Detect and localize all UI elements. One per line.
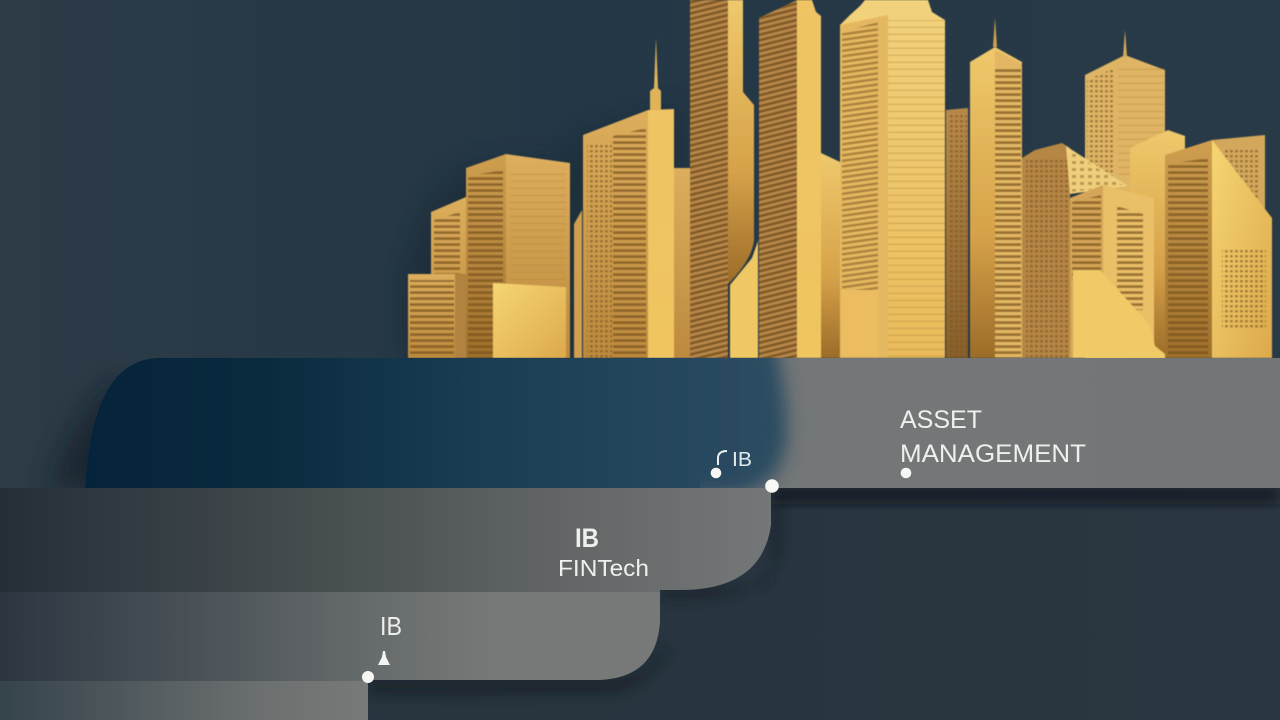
marker: asset management dot [901, 468, 911, 478]
tier 2 band [0, 488, 771, 592]
shadow under third band [368, 640, 666, 694]
label: top IB with hook icon [718, 449, 752, 471]
label: top IB with hook icon: IB [732, 449, 752, 471]
building: front yellow block [493, 283, 566, 358]
city skyline [408, 0, 1272, 360]
building: back left tower [431, 197, 466, 358]
label: IB FINTech: FINTech [558, 555, 649, 581]
building: far right block [1165, 135, 1272, 358]
building: mid block [821, 153, 857, 358]
shadow under second band [660, 500, 782, 600]
building: tan back block [1130, 130, 1185, 358]
shadow under top band [772, 486, 1280, 504]
building: tall tower [690, 0, 754, 358]
icon: small pin [378, 651, 390, 665]
label: asset management [900, 406, 1086, 468]
tier 1 band [85, 358, 1280, 488]
marker: top IB dot [711, 468, 721, 478]
label: asset management: MANAGEMENT [900, 440, 1086, 468]
building: connector [674, 168, 690, 358]
building: back right tower [1085, 30, 1165, 360]
building shadows [400, 105, 680, 358]
building: mid front [1070, 185, 1170, 358]
marker: tier corner dot [765, 479, 779, 493]
tier 4 band [0, 681, 368, 720]
label: IB FINTech [558, 523, 649, 581]
label: asset management: ASSET [900, 406, 982, 434]
label: IB FINTech: IB [575, 523, 599, 553]
building: slim tower [970, 18, 1022, 358]
label: lower IB: IB [380, 611, 402, 641]
building: right of wedge tower [759, 0, 821, 358]
building: wide block [466, 154, 570, 358]
building: low front left [408, 274, 466, 358]
marker: lower corner dot [362, 671, 374, 683]
building: spire tower [574, 38, 674, 358]
shadow left of top band [50, 375, 120, 490]
building: angled block [1022, 143, 1128, 358]
building: light wedge [730, 241, 758, 358]
tier 3 band [0, 592, 660, 681]
building: grand tower [840, 0, 945, 358]
building: narrow dark tower [946, 108, 968, 358]
